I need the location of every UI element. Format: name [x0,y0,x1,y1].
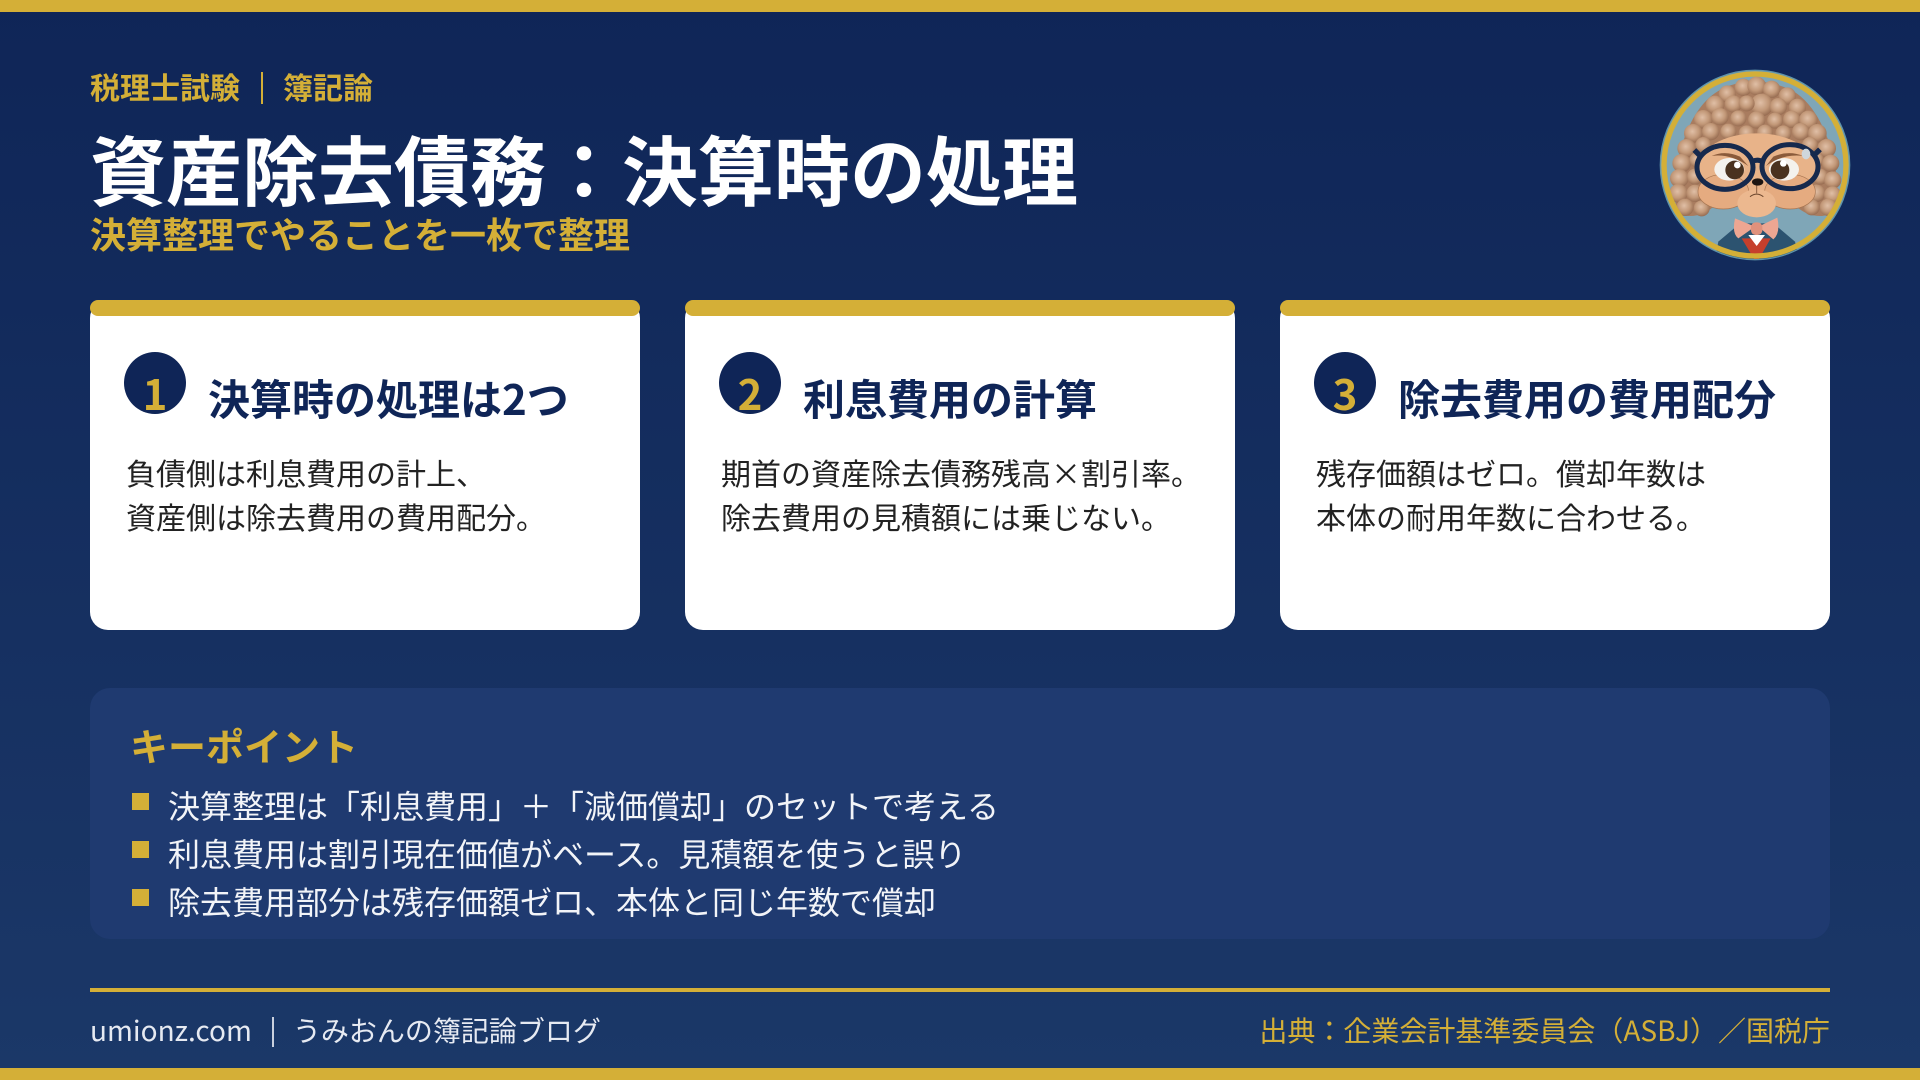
card 1 body: 資産側は除去費用の費用配分。 [126,494,546,538]
bottom accent bar [0,1068,1920,1080]
card 2 number badge [719,352,781,414]
key points heading: キーポイント [130,717,358,772]
top accent bar [0,0,1920,12]
bullet text 1: 決算整理は「利息費用」＋「減価償却」のセットで考える [168,782,999,828]
card 2 heading: 利息費用の計算 [803,367,1097,428]
card 2 accent bar [685,300,1235,316]
icon: poodle avatar with glasses [1660,70,1850,260]
card 3 accent bar [1280,300,1830,316]
bullet marker 3 [132,889,149,906]
bullet text 3: 除去費用部分は残存価額ゼロ、本体と同じ年数で償却 [168,878,936,924]
panel: key points [90,688,1830,939]
card 1 body: 負債側は利息費用の計上、 [126,450,486,494]
card 1 number badge [124,352,186,414]
card 1 heading: 決算時の処理は2つ [208,367,569,428]
card 3 heading: 除去費用の費用配分 [1398,367,1776,428]
footer: source: 出典：企業会計基準委員会（ASBJ）／国税庁 [1259,1010,1830,1050]
bullet text 2: 利息費用は割引現在価値がベース。見積額を使うと誤り [168,830,966,876]
panel: card 1 [90,300,640,630]
bullet marker 1 [132,793,149,810]
footer rule [90,988,1830,992]
panel: card 2 [685,300,1235,630]
title: 資産除去債務：決算時の処理 [90,112,1078,222]
card 1 accent bar [90,300,640,316]
footer: site and blog name: umionz.com うみおんの簿記論ブログ [90,1010,601,1050]
card 2 body: 除去費用の見積額には乗じない。 [721,494,1171,538]
panel: card 3 [1280,300,1830,630]
card 2 body [721,450,1201,538]
card 3 body: 本体の耐用年数に合わせる。 [1316,494,1706,538]
bullet marker 2 [132,841,149,858]
eyebrow: category: 税理士試験 簿記論 [90,64,373,108]
card 3 body: 残存価額はゼロ。償却年数は [1316,450,1706,494]
card 2 body: 期首の資産除去債務残高×割引率。 [721,450,1201,494]
card 3 body [1316,450,1706,538]
card 1 body [126,450,546,538]
subtitle: 決算整理でやることを一枚で整理 [90,207,630,259]
card 3 number badge [1314,352,1376,414]
